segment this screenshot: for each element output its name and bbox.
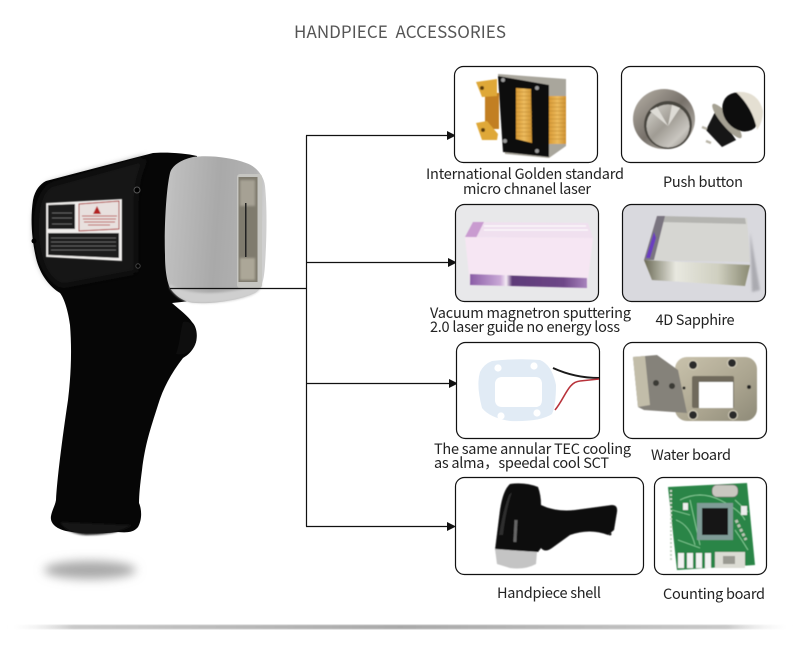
caption xyxy=(434,438,631,473)
light guide crystal image xyxy=(465,222,593,288)
arrow to light guide xyxy=(306,258,457,267)
connector lines xyxy=(170,131,458,531)
arrow to shell xyxy=(306,522,456,531)
caption xyxy=(430,302,631,337)
laser bar image xyxy=(476,74,566,158)
warning label xyxy=(46,199,122,261)
trigger xyxy=(176,322,196,354)
handpiece device xyxy=(32,153,266,535)
push button image xyxy=(633,85,768,149)
caption: micro chnanel laser xyxy=(463,178,591,199)
panel: counting board xyxy=(654,478,766,604)
screws xyxy=(32,187,140,268)
caption: The same annular TEC cooling xyxy=(434,438,631,459)
caption: Push button xyxy=(663,171,743,192)
bottom shadow bar xyxy=(10,625,790,629)
head treatment window xyxy=(237,174,262,288)
caption: International Golden standard xyxy=(426,163,624,184)
caption: as alma，speedal cool SCT xyxy=(434,452,609,473)
silver head xyxy=(165,156,266,303)
caption: Vacuum magnetron sputtering xyxy=(430,302,631,323)
panel: 4D sapphire xyxy=(622,204,766,330)
panel: handpiece shell xyxy=(456,478,644,603)
panel: micro channel laser xyxy=(426,66,624,199)
circuit board image xyxy=(668,483,755,570)
title: HANDPIECE ACCESSORIES xyxy=(294,18,506,43)
caption: Counting board xyxy=(663,583,765,604)
TEC ring image xyxy=(478,359,599,421)
shell image xyxy=(495,483,617,568)
panel: TEC cooling xyxy=(434,342,631,473)
panel: push button xyxy=(622,66,768,192)
floor shadow under handpiece xyxy=(44,561,136,579)
caption xyxy=(426,163,624,199)
handpiece black body xyxy=(32,153,200,533)
caption: Water board xyxy=(651,444,731,465)
caption: Handpiece shell xyxy=(497,582,601,603)
panel: water board xyxy=(624,342,766,465)
panel: laser light guide xyxy=(430,204,631,337)
water board image xyxy=(633,355,757,421)
caption: 4D Sapphire xyxy=(656,309,734,330)
sapphire crystal image xyxy=(644,216,760,292)
caption: 2.0 laser guide no energy loss xyxy=(430,316,620,337)
arrow to TEC xyxy=(306,379,458,388)
arrow to laser xyxy=(306,131,456,140)
